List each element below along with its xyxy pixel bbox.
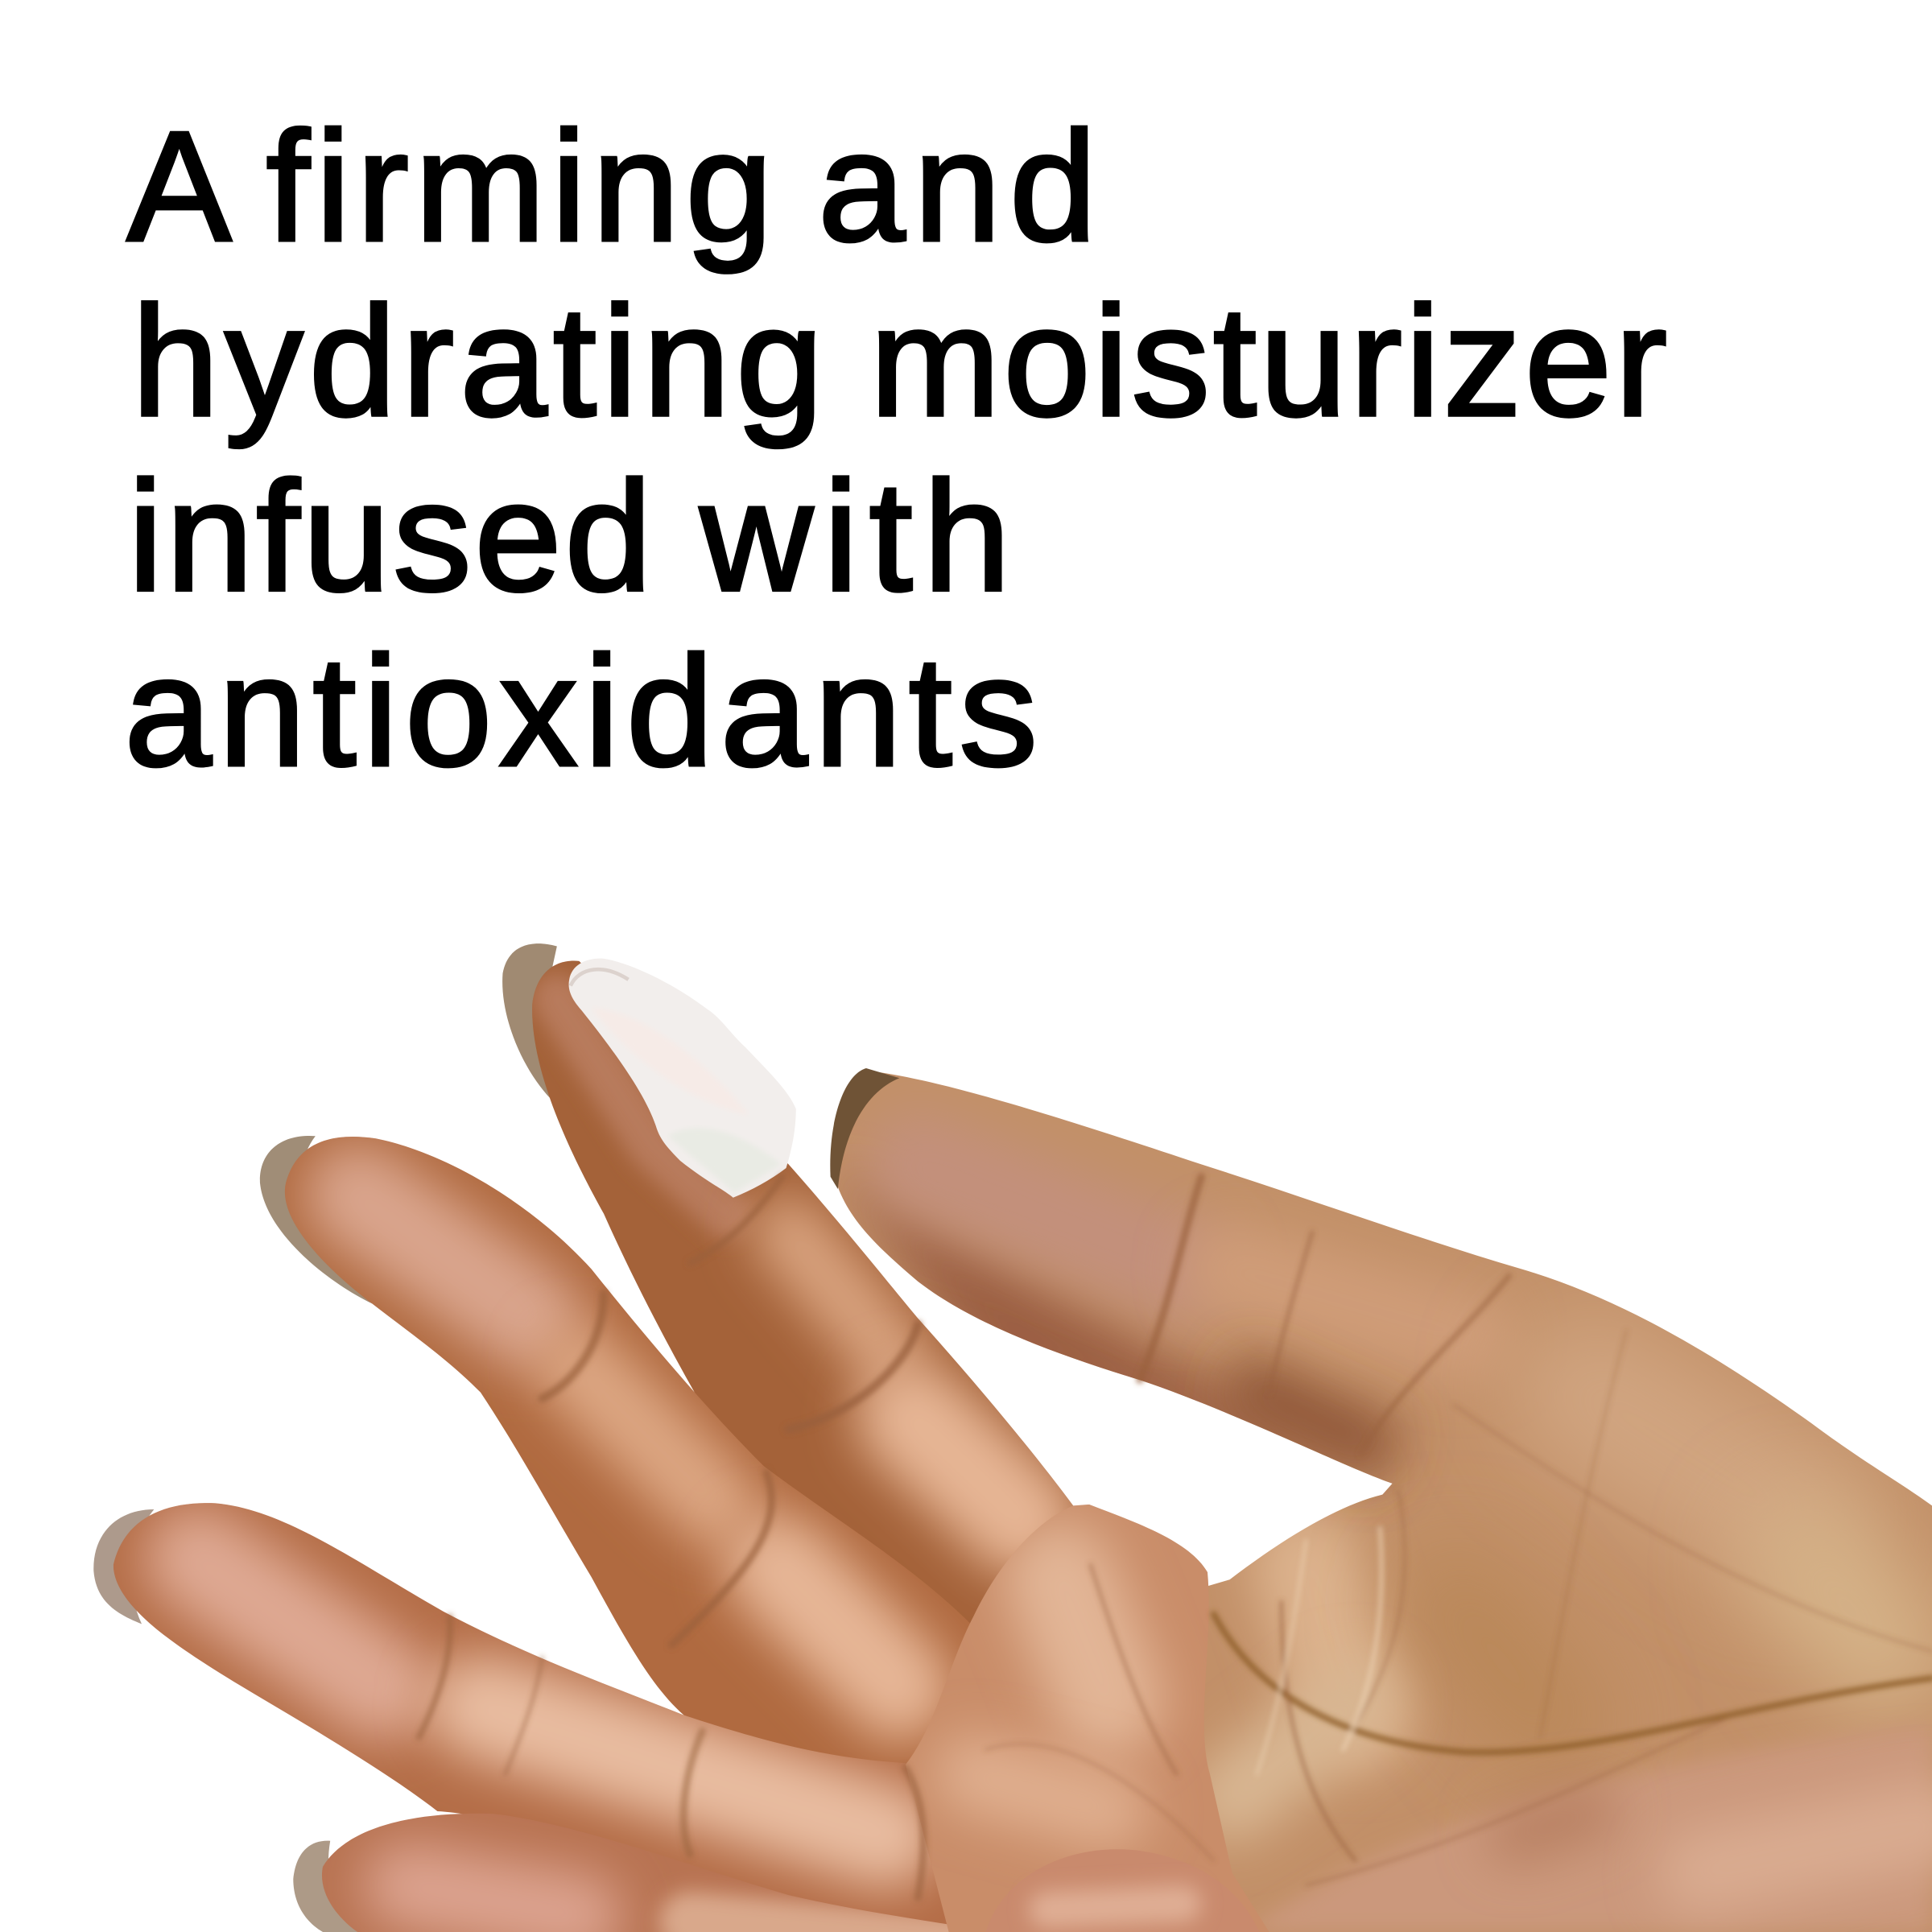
little finger xyxy=(105,1497,992,1932)
little nail xyxy=(93,1509,154,1624)
title: infused xyxy=(128,449,652,624)
middle nail xyxy=(502,943,562,1109)
palm base pad xyxy=(899,1497,1282,1932)
title: antioxidants xyxy=(125,625,1038,799)
photo: hand with cream xyxy=(93,943,1932,1932)
ring finger xyxy=(285,1137,970,1763)
middle finger xyxy=(532,961,1073,1623)
title xyxy=(125,99,1667,799)
title: A xyxy=(127,99,232,274)
lower palm xyxy=(1245,1725,1932,1932)
thumb nail xyxy=(830,1068,899,1189)
thumb and palm xyxy=(813,1059,1932,1932)
title: moisturizer xyxy=(870,275,1667,449)
title: firming xyxy=(266,99,773,274)
bottom nail xyxy=(293,1841,357,1932)
cream dollop xyxy=(569,959,796,1198)
bottom finger xyxy=(322,1814,948,1932)
ring nail xyxy=(260,1136,372,1303)
title: hydrating xyxy=(132,275,823,449)
title: with xyxy=(699,449,1010,624)
title: and xyxy=(818,99,1096,274)
skin creases xyxy=(419,1177,1932,1897)
